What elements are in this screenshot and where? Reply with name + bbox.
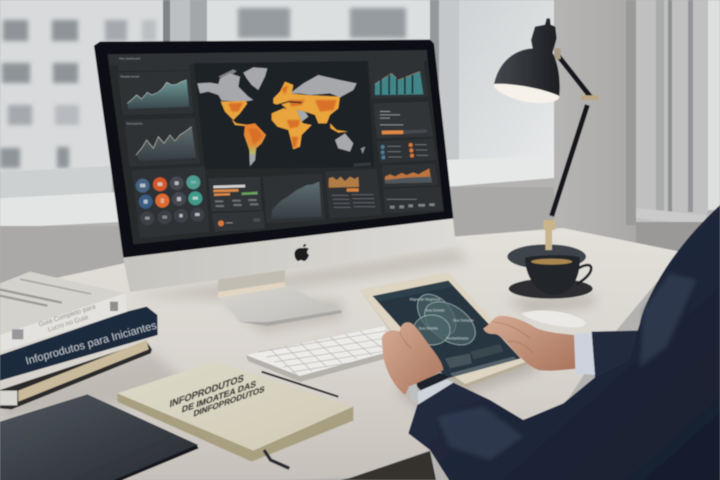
panel: large area chart [263,173,325,223]
panel: world map [194,61,374,169]
bookmark ribbon [264,450,289,468]
mouse, tablet, hands and suit [360,205,720,480]
tablet screen: Sua Solução [453,319,474,323]
panel: status list [377,138,437,163]
venn diagram [410,287,483,354]
tablet screen: Sua Divisão [425,309,445,313]
tablet screen: Sua Divisão [419,326,438,330]
tablet screen: Mapa de Negócios [410,298,440,302]
notebook cover title [169,373,266,419]
iMac stand [218,270,342,326]
iMac chin with logo [123,218,456,292]
notebook cover title: DE IMOATEA DAS [181,378,257,415]
icon: apple logo [295,244,309,261]
book stack [0,272,159,409]
suit jacket [408,205,720,480]
panel: line chart 2: Desempenho [127,121,143,125]
panel: line chart 1: Receita mensal [121,75,139,79]
mouse [522,311,585,327]
orange heat regions [221,82,348,149]
shirt cuff right [574,333,595,375]
lamp light [494,84,559,103]
notebook cover title: INFOPRODUTOS [169,373,244,410]
lamp brass stem [543,220,555,250]
pen [262,372,338,397]
iMac display [94,40,453,258]
shirt cuff left [418,379,453,406]
lamp base [507,244,586,269]
book: navy Infoprodutos para Iniciantes [0,307,159,381]
lamp and coffee [494,18,598,299]
tablet [360,273,530,387]
panel: social icons [132,167,209,238]
panel: column chart [368,60,428,99]
panel: table with orange chart [325,169,382,218]
book: dark lower book with pages [0,340,152,409]
gray continents [197,67,365,166]
hand: right [483,316,575,371]
saucer [509,279,593,299]
panel: mini card [212,211,265,232]
lamp shade [494,18,560,96]
monitor bezel [94,40,453,258]
panel: action buttons [383,187,443,213]
book: white guide [0,272,127,352]
dark notebook [0,394,199,480]
tablet screen [373,281,521,379]
panel: list with progress bar [373,102,433,138]
notebook cover title: DINFOPRODUTOS [193,384,266,419]
panel: line chart 1 [117,63,193,115]
book: white guide: Lucro no Guia [47,314,89,334]
coffee cup [525,255,591,295]
hand: left [382,322,443,395]
lamp arm [552,48,598,216]
inland seas [277,102,302,105]
desk surface [0,228,682,480]
cream notebook [117,362,353,468]
keyboard [246,326,388,382]
panel: orange area chart [382,163,438,188]
book: navy Infoprodutos para Iniciantes: Infoprodutos para Iniciantes [24,320,159,368]
dashboard screen: Meu dashboard [119,57,140,61]
desk soft shadows [0,248,600,420]
book: white guide: Guia Completo para [38,303,97,329]
panel: line chart 2 [124,118,200,167]
wristwatch [408,373,450,404]
right sleeve [592,331,643,378]
panel: bar progress [208,177,262,212]
dashboard screen [107,50,444,244]
tablet screen: Rentabilidade [446,336,469,340]
